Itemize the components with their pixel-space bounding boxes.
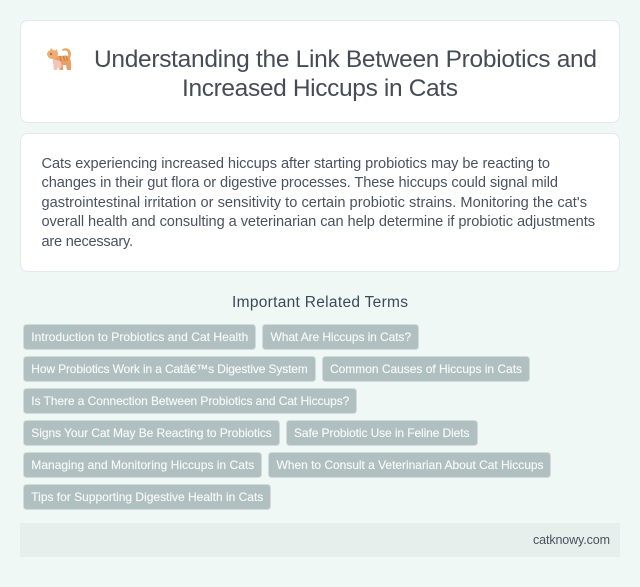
tag: Signs Your Cat May Be Reacting to Probiotics	[31, 426, 272, 440]
text block: description	[42, 156, 595, 250]
text block: description: overall health and consulting a veterinarian can help determine if probiotic adjustments	[42, 214, 595, 230]
footer	[20, 523, 620, 557]
tag: When to Consult a Veterinarian About Cat Hiccups	[276, 458, 544, 472]
tag	[24, 452, 262, 478]
tag: Safe Probiotic Use in Feline Diets	[294, 426, 470, 440]
text block: description: gastrointestinal irritation or sensitivity to certain probiotic strains. Monitoring the cat's	[42, 195, 587, 211]
title: Understanding the Link Between Probiotics and	[94, 46, 597, 73]
tag: Common Causes of Hiccups in Cats	[330, 362, 522, 376]
panel: related term tags	[24, 324, 550, 510]
tag: How Probiotics Work in a Catâ€™s Digestive System	[31, 362, 308, 376]
footer source text: catknowy.com	[533, 533, 610, 547]
text block: description: are necessary.	[42, 234, 133, 250]
tag	[24, 324, 256, 350]
text block: description: changes in their gut flora or digestive processes. These hiccups could signal mild	[42, 175, 558, 191]
icon: cat	[47, 48, 71, 70]
title: Increased Hiccups in Cats	[182, 75, 458, 102]
tag	[262, 324, 418, 350]
tag	[268, 452, 550, 478]
panel: title card	[20, 20, 620, 122]
panel: description card	[20, 134, 620, 272]
tag	[24, 356, 316, 382]
tag	[24, 484, 270, 510]
tag	[286, 420, 478, 446]
tag: What Are Hiccups in Cats?	[270, 330, 411, 344]
heading: important related terms: Important Related Terms	[232, 294, 408, 311]
tag: Tips for Supporting Digestive Health in Cats	[31, 490, 263, 504]
text block: description: Cats experiencing increased hiccups after starting probiotics may be reacting to	[42, 156, 550, 172]
tag	[24, 388, 356, 414]
tag: Is There a Connection Between Probiotics and Cat Hiccups?	[31, 394, 350, 408]
tag: Introduction to Probiotics and Cat Health	[31, 330, 248, 344]
tag: Managing and Monitoring Hiccups in Cats	[31, 458, 254, 472]
tag	[322, 356, 530, 382]
title	[94, 46, 597, 102]
tag	[24, 420, 280, 446]
